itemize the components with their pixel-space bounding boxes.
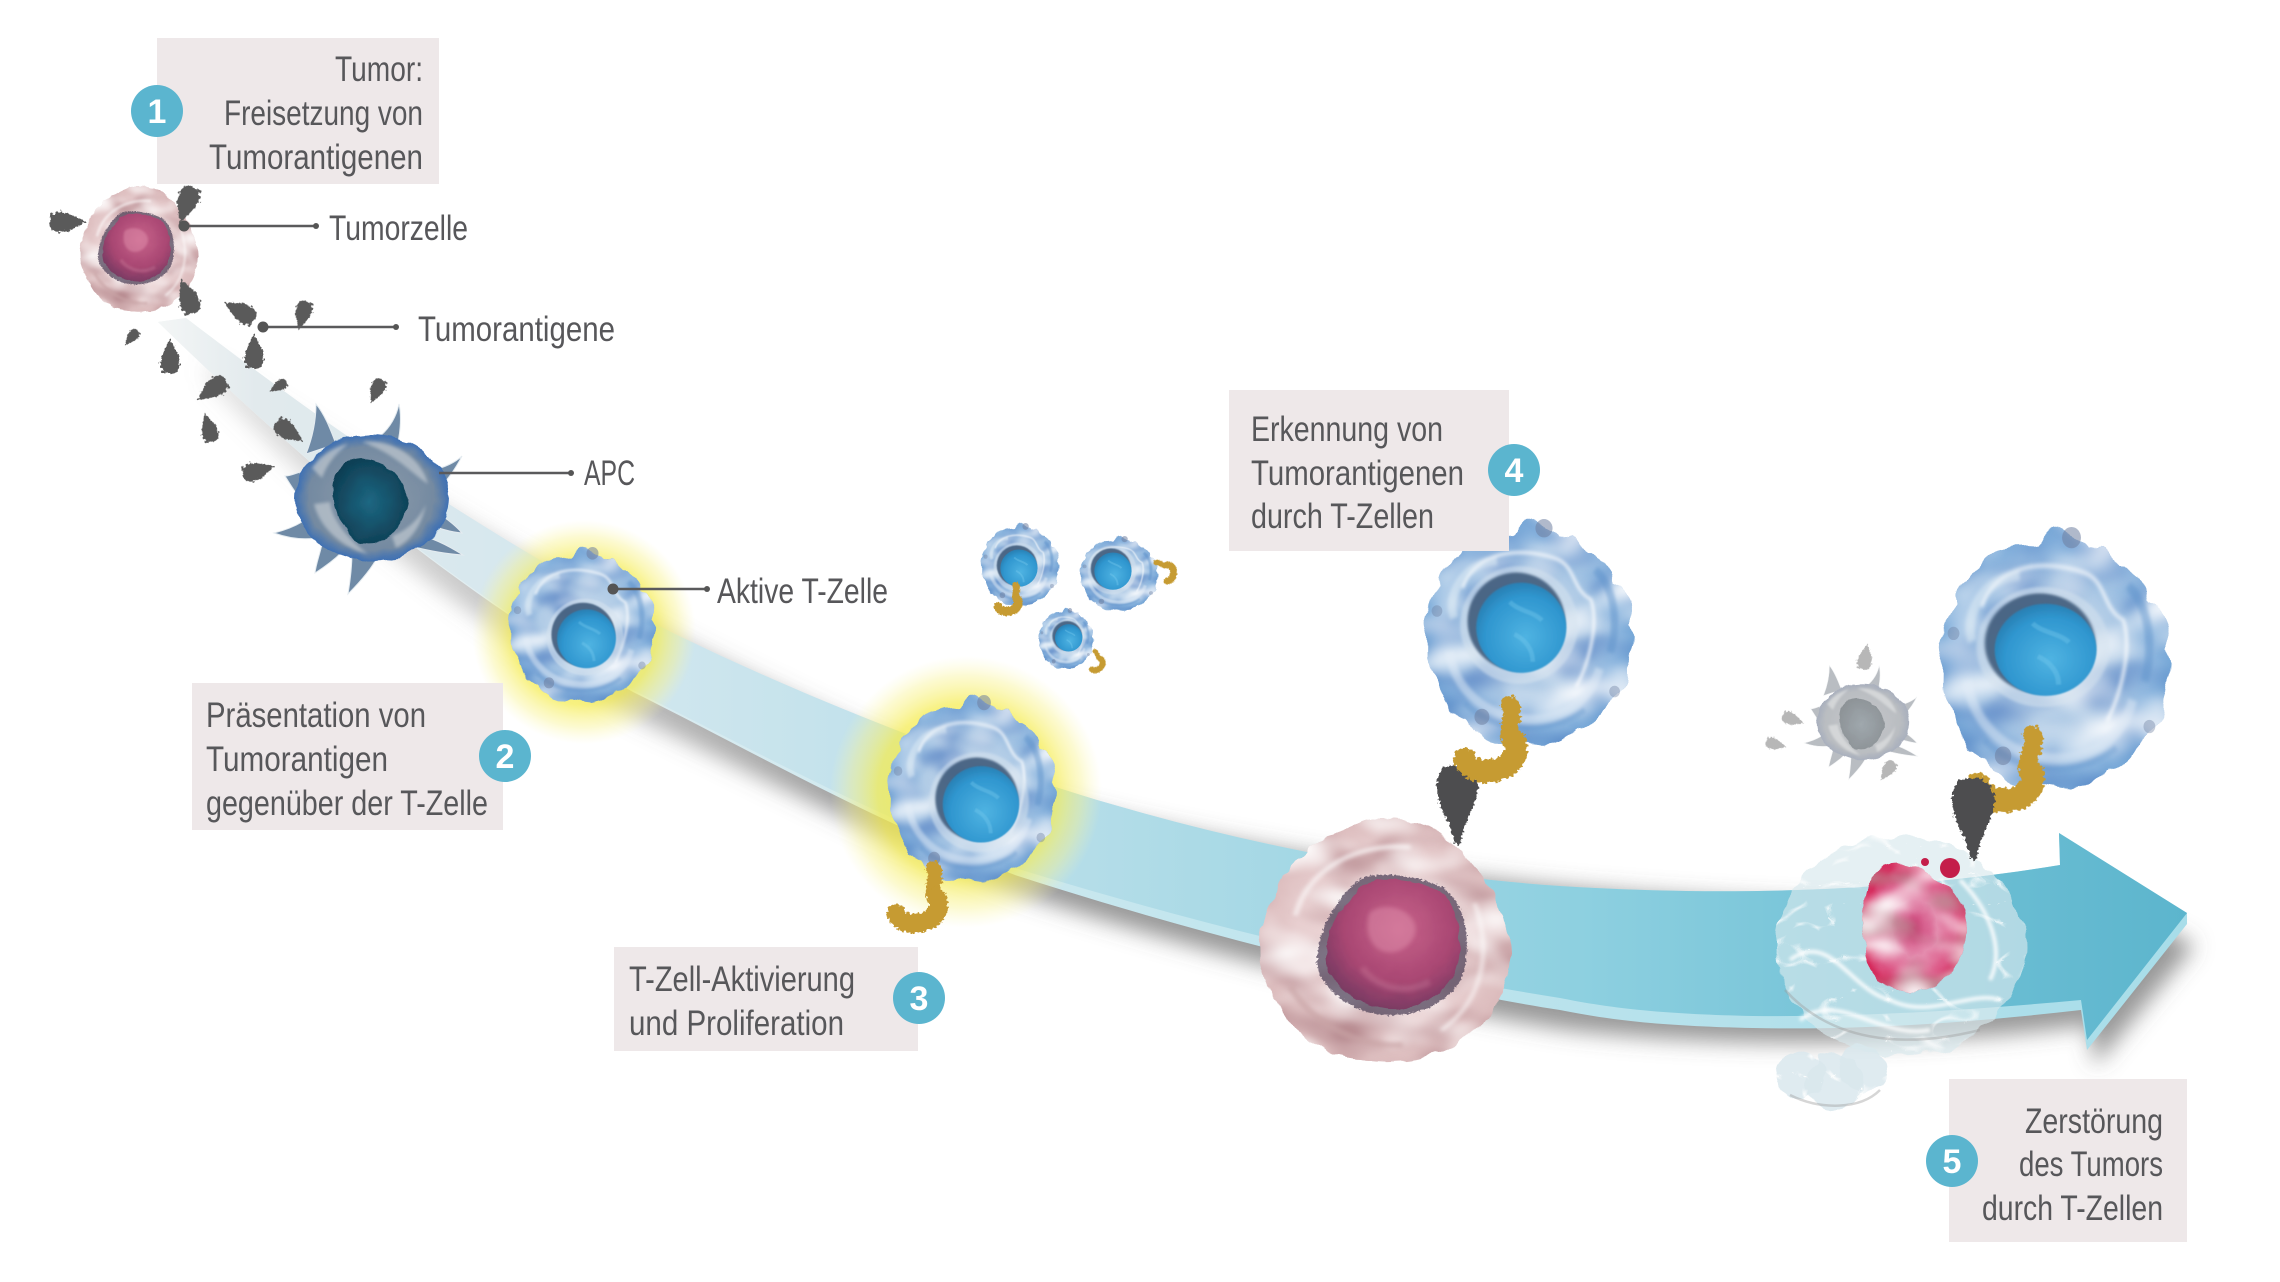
label: APC xyxy=(439,454,635,493)
step 5 callout: Zerstörung xyxy=(2025,1102,2163,1141)
glow: active T cell step 2 xyxy=(472,520,696,744)
label: Tumorantigene: Tumorantigene xyxy=(418,310,615,349)
T cell attacking tumor xyxy=(1939,526,2172,859)
step 4 callout: durch T-Zellen xyxy=(1251,497,1434,536)
active T cell step 2 xyxy=(508,547,656,702)
tumor antigens scattered xyxy=(50,184,388,483)
label: APC: APC xyxy=(584,454,635,493)
ribbon face xyxy=(158,318,2187,1040)
step 4 callout: Tumorantigenen xyxy=(1251,454,1464,493)
T cell recognising tumor antigen xyxy=(1424,518,1635,771)
step 2 callout xyxy=(192,683,531,830)
step 1 callout: Freisetzung von xyxy=(224,94,423,133)
step 3 callout: T-Zell-Aktivierung xyxy=(629,960,855,999)
step 2 callout: gegenüber der T-Zelle xyxy=(206,784,488,823)
label: Tumorantigene xyxy=(258,310,615,349)
arrow: curved process ribbon xyxy=(158,318,2195,1066)
step 2 callout: Präsentation von xyxy=(206,696,426,735)
destroyed tumor cell xyxy=(1776,836,2024,1110)
step 3 callout: 3 xyxy=(910,980,928,1018)
ribbon shadow xyxy=(208,360,2195,1066)
label: Tumorzelle xyxy=(178,209,468,248)
large tumor cell with antigen xyxy=(1259,765,1511,1062)
step 5 callout xyxy=(1926,1079,2187,1242)
proliferating T cells xyxy=(981,523,1176,672)
label: Aktive T-Zelle xyxy=(608,572,888,611)
label: Aktive T-Zelle: Aktive T-Zelle xyxy=(717,572,888,611)
step 4 callout xyxy=(1229,390,1540,551)
step 3 callout: und Proliferation xyxy=(629,1004,844,1043)
step 5 callout: durch T-Zellen xyxy=(1982,1189,2163,1228)
step 2 callout: Tumorantigen xyxy=(206,740,388,779)
step 5 callout: 5 xyxy=(1943,1143,1961,1181)
step 4 callout: 4 xyxy=(1505,452,1524,490)
step 1 callout: 1 xyxy=(148,93,166,131)
label: Tumorzelle: Tumorzelle xyxy=(329,209,468,248)
step 5 callout: des Tumors xyxy=(2019,1145,2163,1184)
step 1 callout: Tumorantigenen xyxy=(209,138,423,177)
antigen presenting cell xyxy=(274,404,463,594)
step 3 callout xyxy=(614,947,945,1051)
step 2 callout: 2 xyxy=(496,738,514,776)
ribbon underside strip xyxy=(158,318,2187,1050)
step 1 callout: Tumor: xyxy=(335,50,423,89)
glow: active T cell step 3 xyxy=(830,656,1102,928)
step 4 callout: Erkennung von xyxy=(1251,410,1443,449)
active T cell step 3 with receptor xyxy=(887,695,1057,924)
step 1 callout xyxy=(131,38,439,184)
tumor cell small xyxy=(80,186,198,312)
faded APC with dispersing antigens xyxy=(1765,643,1918,784)
